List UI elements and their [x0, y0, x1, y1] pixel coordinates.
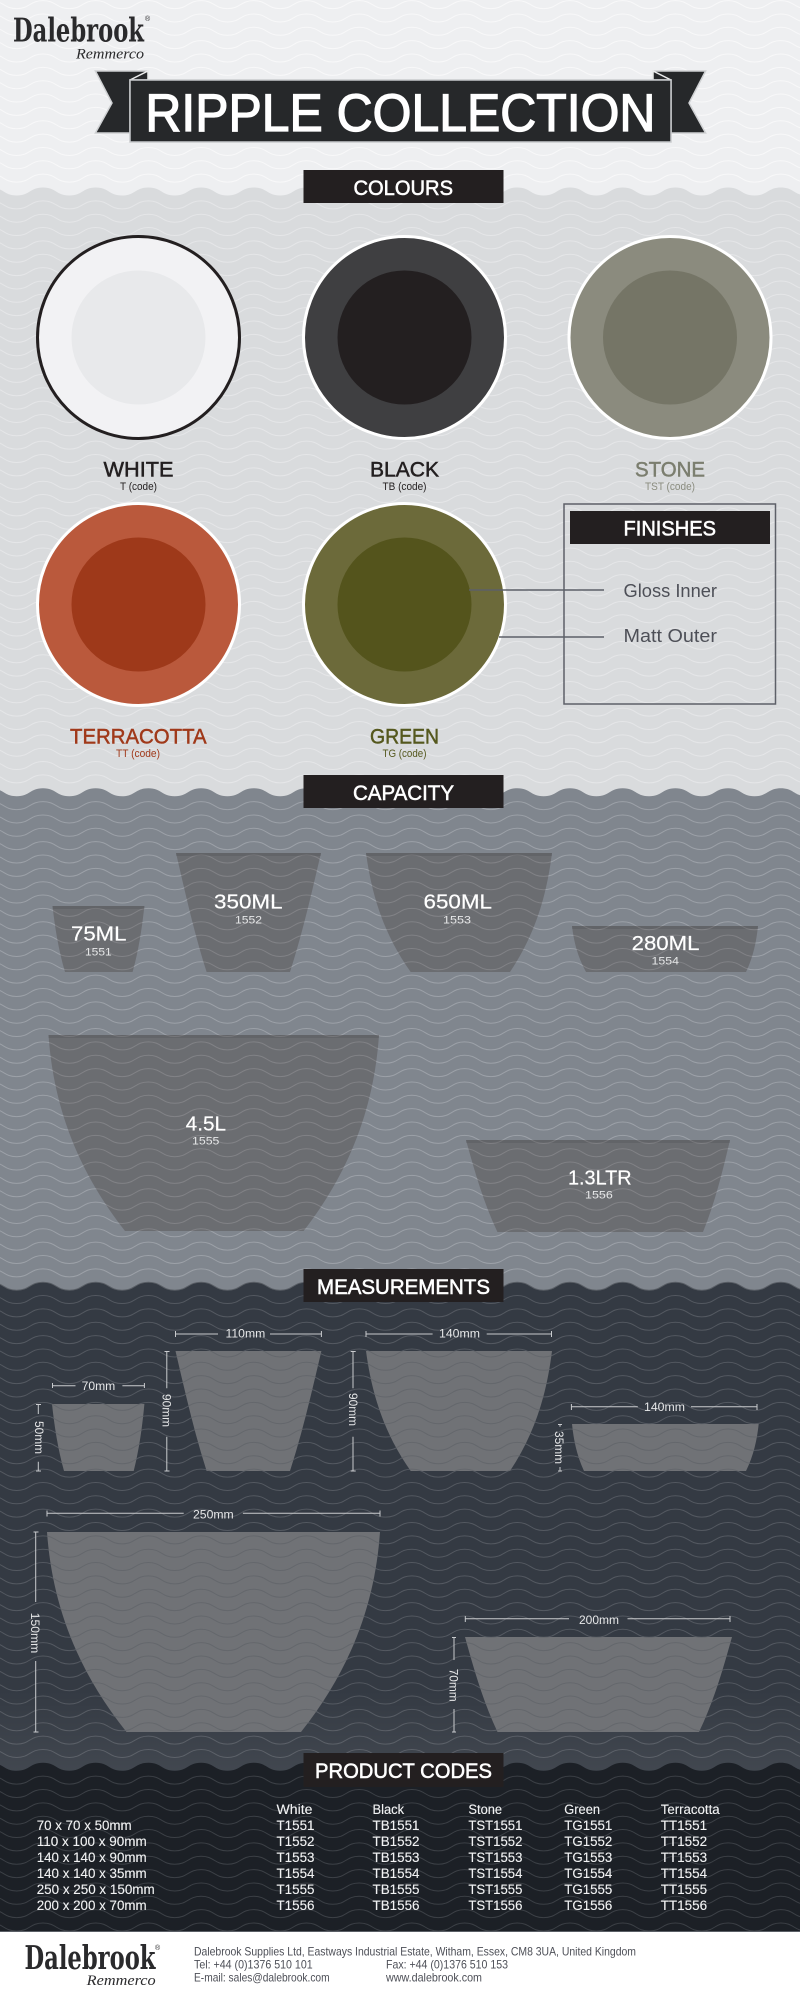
contact details: www.dalebrook.com: [385, 1971, 482, 1985]
pot: 75ml: [52, 906, 144, 972]
table: product codes: Stone: [468, 1802, 502, 1817]
diagram: 200mm pot: [446, 1613, 732, 1732]
pot: 75ml: 1551: [85, 947, 112, 959]
panel: footer: [0, 1931, 800, 2000]
table: product codes: TT1552: [661, 1834, 707, 1849]
table: product codes: TT1554: [661, 1866, 708, 1881]
table: product codes: T1555: [276, 1882, 314, 1897]
swatch: stone: TST (code): [645, 481, 695, 493]
title text: RIPPLE COLLECTION: [145, 84, 655, 143]
table: product codes: Terracotta: [661, 1802, 720, 1817]
logo: Dalebrook Remmerco top: [13, 11, 151, 63]
table: product codes: TB1556: [372, 1898, 420, 1913]
table: product codes: White: [276, 1802, 312, 1817]
table: product codes: Black: [372, 1802, 404, 1817]
diagram: shallow 140mm pot: 140mm: [644, 1400, 685, 1414]
table: product codes: T1554: [276, 1866, 315, 1881]
panel: capacity background: [0, 788, 800, 1300]
title banner: [95, 71, 706, 143]
table: product codes: Green: [564, 1802, 600, 1817]
diagram: 70mm pot: 50mm: [32, 1421, 46, 1454]
contact details: Tel: +44 (0)1376 510 101: [194, 1958, 313, 1972]
table: product codes: TST1554: [468, 1866, 523, 1881]
table: product codes: TG1556: [564, 1898, 612, 1913]
swatch: terracotta: TT (code): [116, 748, 160, 760]
logo: Dalebrook Remmerco footer: Remmerco: [86, 1973, 156, 1989]
table: product codes: TST1555: [468, 1882, 522, 1897]
table: product codes: TST1552: [468, 1834, 522, 1849]
panel: colours background: [0, 188, 800, 820]
table: product codes: T1551: [276, 1818, 314, 1833]
table: product codes: [37, 1802, 720, 1913]
diagram: 250mm pot: 150mm: [28, 1613, 42, 1653]
heading: colours: [304, 170, 504, 203]
table: product codes: TB1551: [372, 1818, 420, 1833]
pot: 650ml: 650ML: [424, 892, 492, 914]
table: product codes: TT1555: [661, 1882, 707, 1897]
heading: product codes: [304, 1753, 504, 1787]
table: product codes: TT1553: [661, 1850, 707, 1865]
pot: 650ml: 1553: [443, 914, 471, 926]
logo: Dalebrook Remmerco top: Dalebrook: [13, 11, 145, 50]
diagram: 140mm pot: [346, 1327, 552, 1471]
callout: gloss inner: Gloss Inner: [624, 581, 717, 601]
diagram: 250mm pot: 250mm: [193, 1508, 234, 1522]
diagram: 140mm pot: 140mm: [439, 1327, 480, 1341]
table: product codes: TG1555: [564, 1882, 612, 1897]
heading: colours: COLOURS: [354, 177, 453, 200]
diagram: shallow 140mm pot: 35mm: [552, 1431, 566, 1464]
diagram: 70mm pot: 70mm: [82, 1379, 115, 1393]
diagram: 110mm pot: 110mm: [226, 1327, 265, 1341]
swatch: white: WHITE: [104, 459, 174, 482]
diagram: 70mm pot: [32, 1379, 144, 1471]
contact details: [194, 1945, 636, 1985]
pot: 4.5l: [48, 1035, 379, 1231]
contact details: Dalebrook Supplies Ltd, Eastways Industrial Estate, Witham, Essex, CM8 3UA, United Kingdom: [194, 1945, 636, 1959]
pot: 4.5l: 1555: [192, 1136, 219, 1148]
swatch: terracotta: TERRACOTTA: [70, 726, 207, 749]
heading: measurements: [304, 1269, 504, 1302]
table: product codes: 110 x 100 x 90mm: [37, 1834, 147, 1849]
diagram: 200mm pot: 70mm: [446, 1669, 460, 1702]
swatch: black: [304, 236, 506, 493]
table: product codes: TG1551: [564, 1818, 612, 1833]
table: product codes: T1553: [276, 1850, 314, 1865]
diagram: 140mm pot: 90mm: [346, 1393, 360, 1426]
table: product codes: 250 x 250 x 150mm: [37, 1882, 155, 1897]
table: product codes: TST1553: [468, 1850, 522, 1865]
table: product codes: 70 x 70 x 50mm: [37, 1818, 132, 1833]
diagram: shallow 140mm pot: [552, 1400, 759, 1471]
table: product codes: T1556: [276, 1898, 314, 1913]
swatch: green: [304, 504, 506, 760]
logo: Dalebrook Remmerco top: ®: [145, 15, 151, 23]
logo: Dalebrook Remmerco top: Remmerco: [75, 47, 145, 63]
background: top band: [0, 0, 800, 200]
panel: finishes: [469, 504, 776, 704]
panel: measurements background: [0, 1282, 800, 1790]
heading: product codes: PRODUCT CODES: [315, 1760, 492, 1783]
table: product codes: TB1554: [372, 1866, 420, 1881]
logo: Dalebrook Remmerco footer: Dalebrook: [24, 1938, 156, 1977]
table: product codes: TB1553: [372, 1850, 420, 1865]
pot: 1.3ltr: [466, 1140, 730, 1232]
swatch: white: T (code): [120, 481, 157, 493]
diagram: 200mm pot: 200mm: [579, 1613, 619, 1627]
callout: matt outer: Matt Outer: [624, 626, 717, 646]
heading: measurements: MEASUREMENTS: [317, 1276, 490, 1299]
swatch: black: BLACK: [370, 459, 439, 482]
table: product codes: TB1555: [372, 1882, 420, 1897]
table: product codes: TT1556: [661, 1898, 707, 1913]
table: product codes: TST1551: [468, 1818, 522, 1833]
pot: 280ml: 1554: [652, 955, 679, 967]
table: product codes: TG1554: [564, 1866, 613, 1881]
table: product codes: TG1553: [564, 1850, 612, 1865]
pot: 350ml: 350ML: [214, 892, 283, 914]
pot: 350ml: [176, 853, 321, 972]
logo: Dalebrook Remmerco footer: [24, 1938, 161, 1989]
swatch: terracotta: [38, 504, 240, 760]
table: product codes: T1552: [276, 1834, 314, 1849]
diagram: 110mm pot: 90mm: [160, 1394, 174, 1427]
logo: Dalebrook Remmerco footer: ®: [155, 1944, 161, 1952]
swatch: stone: [569, 236, 771, 493]
pot: 4.5l: 4.5L: [186, 1113, 226, 1135]
contact details: E-mail: sales@dalebrook.com: [194, 1971, 330, 1985]
diagram: 250mm pot: [28, 1508, 380, 1732]
table: product codes: 140 x 140 x 35mm: [37, 1866, 147, 1881]
pot: 1.3ltr: 1.3LTR: [568, 1168, 632, 1190]
table: product codes: TST1556: [468, 1898, 522, 1913]
swatch: white: [38, 236, 240, 493]
pot: 280ml: [572, 926, 758, 972]
swatch: green: TG (code): [382, 748, 426, 760]
diagram: 110mm pot: [160, 1327, 321, 1471]
pot: 1.3ltr: 1556: [585, 1190, 613, 1202]
table: product codes: 200 x 200 x 70mm: [37, 1898, 147, 1913]
pot: 75ml: 75ML: [71, 924, 126, 946]
table: product codes: TT1551: [661, 1818, 707, 1833]
table: product codes: TG1552: [564, 1834, 612, 1849]
swatch: black: TB (code): [382, 481, 426, 493]
heading: capacity: CAPACITY: [353, 782, 454, 805]
pot: 350ml: 1552: [235, 914, 262, 926]
contact details: Fax: +44 (0)1376 510 153: [386, 1958, 508, 1972]
table: product codes: TB1552: [372, 1834, 420, 1849]
pot: 650ml: [366, 853, 552, 972]
swatch: stone: STONE: [635, 459, 705, 482]
pot: 280ml: 280ML: [632, 933, 700, 955]
table: product codes: 140 x 140 x 90mm: [37, 1850, 147, 1865]
panel: finishes: FINISHES: [624, 518, 716, 541]
swatch: green: GREEN: [370, 726, 439, 749]
heading: capacity: [304, 775, 504, 808]
panel: product codes background: [0, 1763, 800, 1940]
